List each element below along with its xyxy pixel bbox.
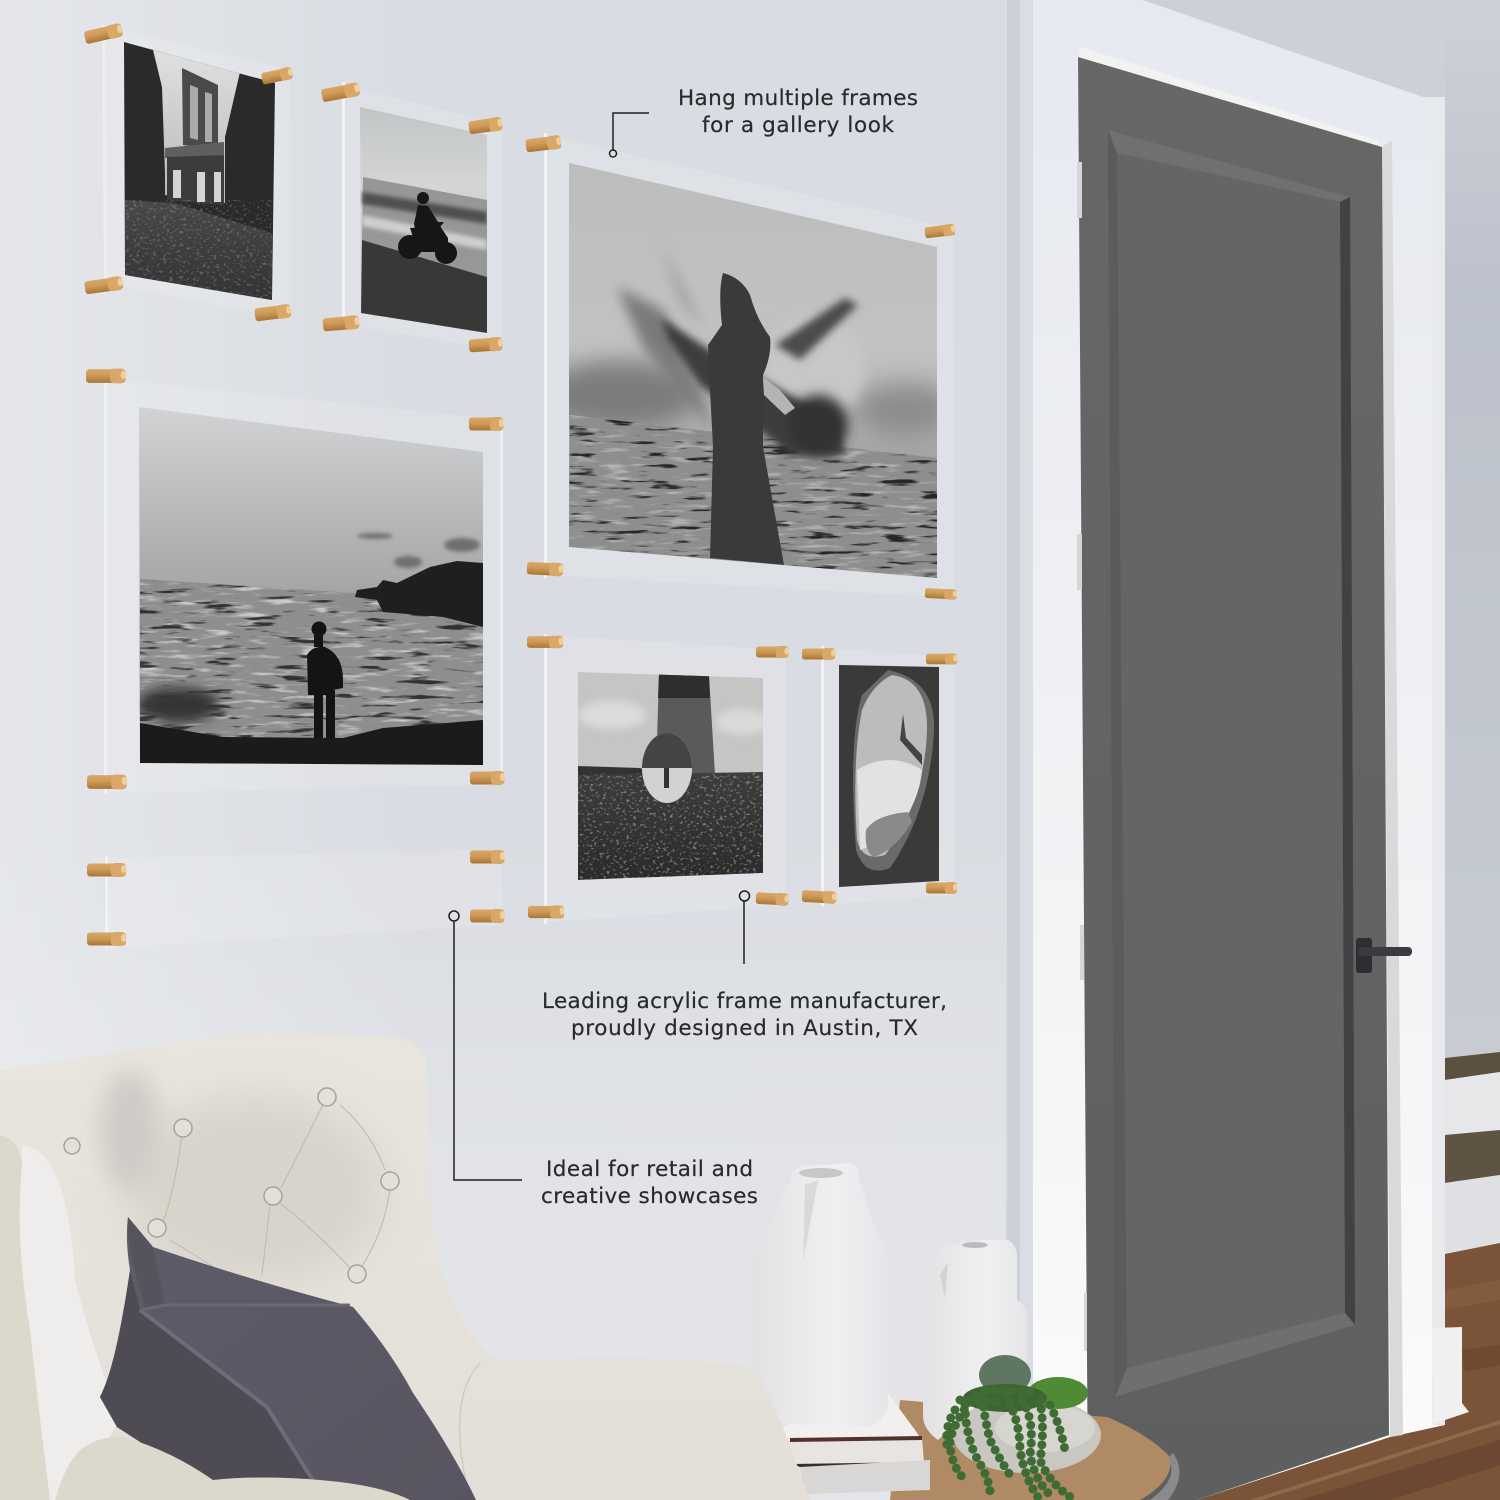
chair tufting seams [163, 1097, 390, 1275]
callout: gallery look: Hang multiple frames [678, 86, 918, 111]
frame: airplane window photo [821, 646, 939, 906]
motorcycle and rider [398, 192, 457, 264]
callout: gallery look: for a gallery look [702, 113, 895, 138]
callout: manufacturer: proudly designed in Austin, TX [571, 1016, 918, 1041]
small vase [923, 1240, 1027, 1440]
sea [565, 410, 940, 580]
standing figure [307, 622, 343, 738]
plant [947, 1355, 1101, 1500]
callout: retail: creative showcases [541, 1184, 758, 1209]
frame: dancer photo [540, 133, 955, 598]
dancer silhouette [708, 273, 784, 565]
door [1077, 57, 1412, 1500]
frame: empty small [105, 850, 503, 948]
door panel [1108, 130, 1355, 1397]
sea [135, 575, 485, 765]
side table [890, 1400, 1179, 1500]
knit throw [55, 1437, 410, 1500]
right side wall and stairs [1190, 0, 1500, 1500]
pillow [100, 1217, 476, 1500]
chair tufting buttons [64, 1088, 399, 1283]
large vase [753, 1163, 888, 1427]
frame: crystal ball photo [544, 634, 786, 924]
callout: retail: Ideal for retail and [546, 1157, 753, 1182]
gold standoff pegs [83, 23, 957, 946]
frame: motorcycle photo [342, 82, 487, 333]
wall background [0, 0, 1015, 1500]
callout: manufacturer [542, 891, 947, 1041]
callout: manufacturer: Leading acrylic frame manufacturer, [542, 989, 947, 1014]
door handle [1356, 938, 1412, 973]
callout: gallery look [610, 86, 918, 157]
frame: bridge photo [102, 25, 275, 300]
chair [0, 1032, 810, 1500]
books [783, 1393, 930, 1494]
callout: retail [449, 911, 758, 1209]
baseboard plinth [1432, 1327, 1469, 1424]
door frame [1005, 0, 1445, 1500]
frame: seascape photo [104, 372, 503, 794]
door hinges [1077, 162, 1087, 1351]
